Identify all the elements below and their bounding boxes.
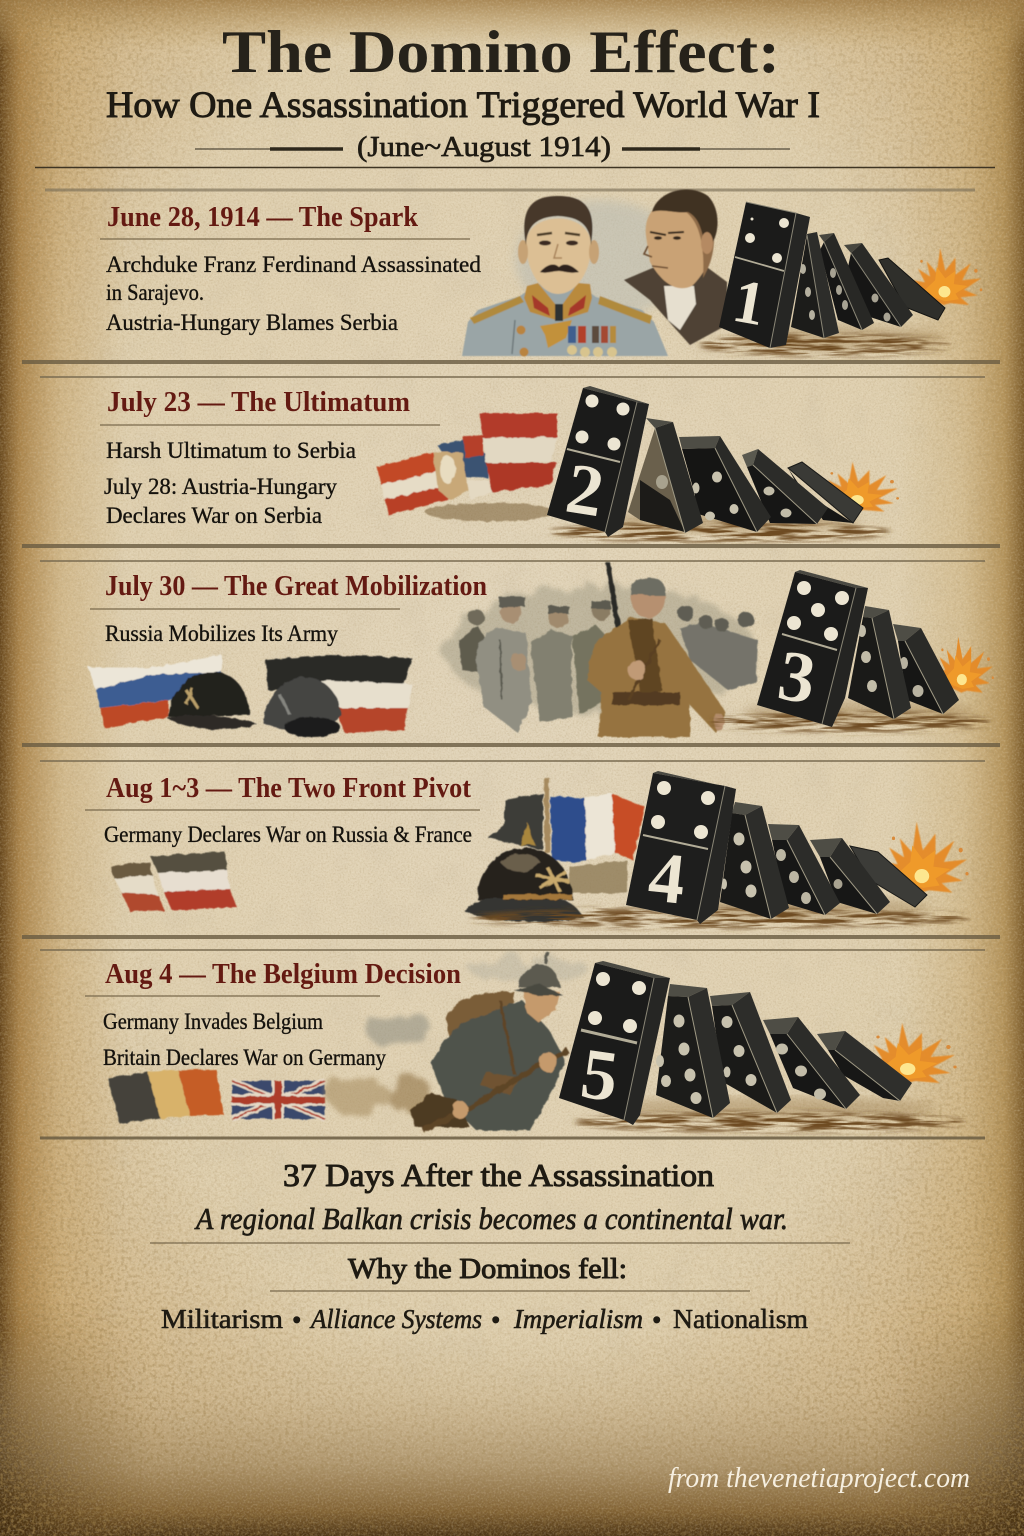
body text: Declares War on Serbia [106, 503, 322, 528]
domino 2 [547, 386, 649, 537]
causes list: Imperialism [513, 1304, 643, 1334]
heading: Aug 1~3 — The Two Front Pivot [106, 773, 472, 804]
panel 4: the two front pivot [85, 771, 970, 928]
ground [575, 1097, 965, 1132]
panel 5: the belgium decision [85, 952, 965, 1132]
why heading: Why the Dominos fell: [348, 1253, 627, 1285]
conclusion subline: A regional Balkan crisis becomes a continental war. [194, 1201, 788, 1236]
body text: in Sarajevo. [106, 280, 204, 305]
date range: (June~August 1914) [357, 131, 611, 163]
body text [103, 1009, 386, 1070]
domino 3 [757, 570, 868, 727]
explosion [822, 462, 899, 512]
explosion [867, 1023, 957, 1083]
domino 5: 5 [576, 1033, 623, 1117]
flags: Belgium and Britain [108, 1069, 325, 1124]
portrait: Franz Ferdinand [462, 196, 685, 357]
domino 2: 2 [561, 448, 609, 532]
falling dominoes: row 3 [848, 606, 959, 719]
domino 5 [559, 961, 670, 1125]
heading: July 23 — The Ultimatum [107, 387, 410, 418]
flags: Germany [110, 852, 237, 912]
ground [700, 325, 950, 356]
causes list: • [652, 1305, 661, 1335]
ground [470, 897, 970, 928]
domino 1: 1 [728, 267, 770, 339]
body text: Britain Declares War on Germany [103, 1045, 386, 1070]
subtitle: How One Assassination Triggered World War I [106, 85, 820, 126]
causes list: • [292, 1305, 301, 1335]
causes list: Nationalism [673, 1304, 808, 1334]
explosion [913, 248, 982, 305]
background smudge [326, 958, 590, 1115]
body text [104, 438, 356, 528]
causes list: Militarism [161, 1304, 283, 1334]
title block [106, 19, 820, 163]
falling dominoes: row 4 [720, 802, 927, 919]
main title: The Domino Effect: [222, 19, 780, 85]
heading: July 30 — The Great Mobilization [105, 571, 487, 602]
panel 3: the great mobilization [88, 563, 994, 737]
domino 3: 3 [773, 635, 821, 719]
panel 2: the ultimatum [100, 386, 899, 542]
conclusion headline: 37 Days After the Assassination [283, 1157, 714, 1193]
causes list [161, 1304, 808, 1335]
panel 1: the spark [100, 189, 982, 357]
portrait: assassin [624, 189, 727, 345]
ground [710, 701, 990, 732]
domino 4: 4 [645, 836, 689, 920]
body text: Germany Invades Belgium [103, 1009, 323, 1034]
explosion [935, 637, 994, 693]
conclusion block [150, 1157, 850, 1335]
body text: Russia Mobilizes Its Army [105, 621, 338, 646]
soldier with rifle [410, 952, 568, 1130]
falling dominoes: row 2 [628, 418, 863, 533]
explosion [883, 822, 969, 893]
causes list: Alliance Systems [309, 1304, 482, 1334]
flags: France and Germany, with helmet [465, 777, 645, 922]
causes list: • [491, 1305, 500, 1335]
ground [550, 511, 890, 542]
heading: Aug 4 — The Belgium Decision [105, 959, 461, 990]
heading: June 28, 1914 — The Spark [107, 202, 418, 233]
domino 1 [719, 202, 810, 348]
body text: Germany Declares War on Russia & France [104, 822, 472, 847]
marching soldiers [459, 563, 758, 737]
source credit: from thevenetiaproject.com [668, 1462, 970, 1494]
body text: Austria-Hungary Blames Serbia [106, 310, 398, 335]
body text: Archduke Franz Ferdinand Assassinated [106, 252, 481, 277]
body text: Harsh Ultimatum to Serbia [106, 438, 356, 463]
falling dominoes: row 5 [656, 984, 912, 1118]
background smudge [445, 585, 755, 715]
body text [106, 252, 481, 335]
domino 4 [626, 771, 736, 924]
flags and helmets [88, 655, 412, 737]
falling dominoes: row 1 [791, 232, 945, 338]
flags: Austria-Hungary and Serbia [377, 413, 557, 521]
body text: July 28: Austria-Hungary [104, 474, 337, 499]
